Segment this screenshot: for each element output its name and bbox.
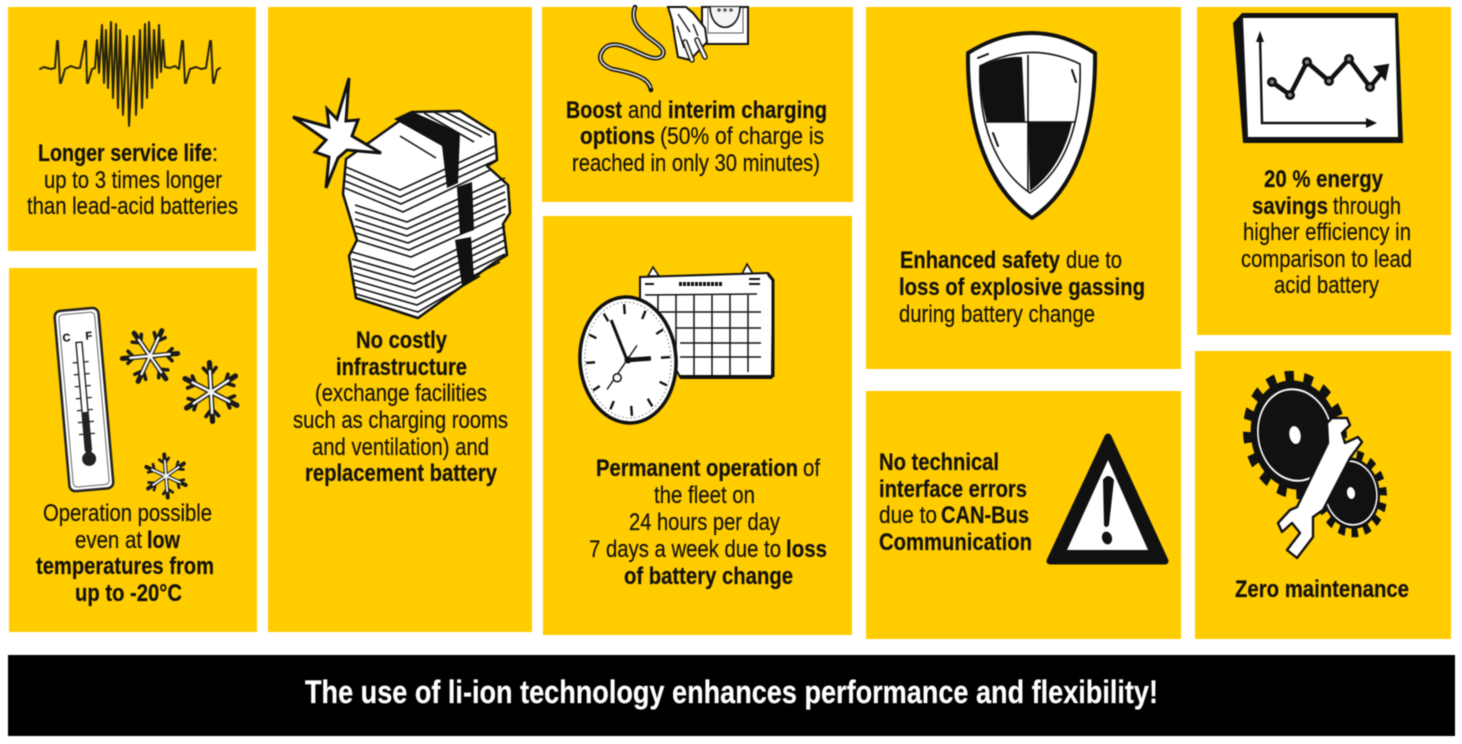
text: permanent operation: 7 days a week due to: [589, 536, 781, 563]
icon: plug and socket: [600, 7, 748, 90]
text: energy savings: acid battery: [1274, 272, 1379, 299]
icon: thermometer: [54, 308, 114, 492]
text: no interface errors: [879, 449, 1032, 556]
panel: no costly infrastructure: [268, 7, 532, 632]
banner: conclusion: [8, 655, 1455, 736]
text: longer service life: than lead-acid batteries: [27, 193, 238, 220]
icon: thermometer: F: [85, 330, 93, 343]
text: no costly infrastructure: such as charging rooms: [293, 407, 508, 434]
text: boost charging: and: [628, 97, 662, 124]
banner text: The use of li-ion technology enhances performance and flexibility!: [305, 674, 1158, 710]
icon: stack of money: [343, 111, 510, 318]
text: no costly infrastructure: replacement battery: [305, 460, 498, 487]
text: longer service life: [27, 140, 238, 220]
text: boost charging: options: [580, 123, 655, 150]
icon: thermometer: C: [62, 332, 71, 345]
text: no interface errors: CAN-Bus: [941, 502, 1029, 529]
panel: permanent operation: [543, 216, 852, 635]
icon: snowflake 2: [184, 361, 238, 423]
text: permanent operation: loss: [786, 536, 827, 563]
text: longer service life: Longer service life: [38, 140, 212, 167]
icon: gears and wrench: [1238, 369, 1389, 558]
text: low temperatures: temperatures from: [36, 553, 214, 580]
text: boost charging: interim charging: [668, 97, 827, 124]
text: boost charging: reached in only 30 minutes): [572, 150, 820, 177]
icon: heartbeat heart: [40, 22, 220, 126]
text: low temperatures: [36, 500, 214, 607]
text: boost charging: Boost: [566, 97, 622, 124]
text: enhanced safety: due to: [1066, 247, 1122, 274]
text: energy savings: comparison to lead: [1241, 246, 1412, 273]
panel: low temperature operation: [9, 268, 257, 632]
icon: clock: [576, 294, 680, 426]
text: boost charging: [566, 97, 827, 177]
text: low temperatures: low: [147, 527, 180, 554]
text: energy savings: higher efficiency in: [1243, 219, 1411, 246]
text: no interface errors: due to: [879, 502, 937, 529]
text: permanent operation: of: [803, 455, 820, 482]
panel: enhanced safety: [866, 7, 1181, 369]
panel: longer service life: [8, 7, 256, 251]
text: energy savings: [1241, 166, 1412, 299]
text: permanent operation: Permanent operation: [596, 455, 798, 482]
text: no costly infrastructure: [293, 327, 508, 487]
text: no interface errors: interface errors: [879, 476, 1027, 503]
text: energy savings: through: [1333, 193, 1401, 220]
text: permanent operation: of battery change: [624, 563, 793, 590]
text: no costly infrastructure: infrastructure: [336, 354, 467, 381]
text: permanent operation: [589, 455, 827, 590]
text: no interface errors: Communication: [879, 529, 1032, 556]
text: low temperatures: even at: [75, 527, 142, 554]
text: zero maintenance: Zero maintenance: [1235, 576, 1409, 603]
text: low temperatures: Operation possible: [43, 500, 212, 527]
icon: warning triangle: [1050, 437, 1165, 561]
icon: calendar: [640, 264, 773, 377]
icon: snowflake 3: [137, 448, 195, 504]
icon: line chart: [1233, 13, 1403, 143]
text: low temperatures: up to -20°C: [75, 580, 182, 607]
text: no interface errors: No technical: [879, 449, 999, 476]
icon: burst star: [293, 78, 381, 188]
text: no costly infrastructure: (exchange facilities: [315, 380, 487, 407]
text: permanent operation: the fleet on: [654, 482, 755, 509]
text: enhanced safety: loss of explosive gassing: [899, 274, 1145, 301]
text: enhanced safety: [899, 247, 1145, 328]
text: energy savings: 20 % energy: [1264, 166, 1384, 193]
icon: shield: [968, 33, 1095, 218]
text: boost charging: (50% of charge is: [660, 123, 824, 150]
text: energy savings: savings: [1252, 193, 1328, 220]
panel: energy savings: [1197, 7, 1451, 335]
text: no costly infrastructure: No costly: [356, 327, 448, 354]
icon: snowflake 1: [116, 320, 184, 392]
panel: zero maintenance: [1195, 351, 1451, 639]
text: enhanced safety: Enhanced safety: [900, 247, 1061, 274]
text: enhanced safety: during battery change: [899, 301, 1095, 328]
panel: boost charging: [542, 7, 853, 202]
text: longer service life: up to 3 times longer: [44, 167, 222, 194]
panel: no interface errors: [866, 391, 1181, 639]
text: longer service life: :: [212, 140, 218, 167]
text: permanent operation: 24 hours per day: [629, 509, 780, 536]
text: no costly infrastructure: and ventilation) and: [312, 434, 489, 461]
